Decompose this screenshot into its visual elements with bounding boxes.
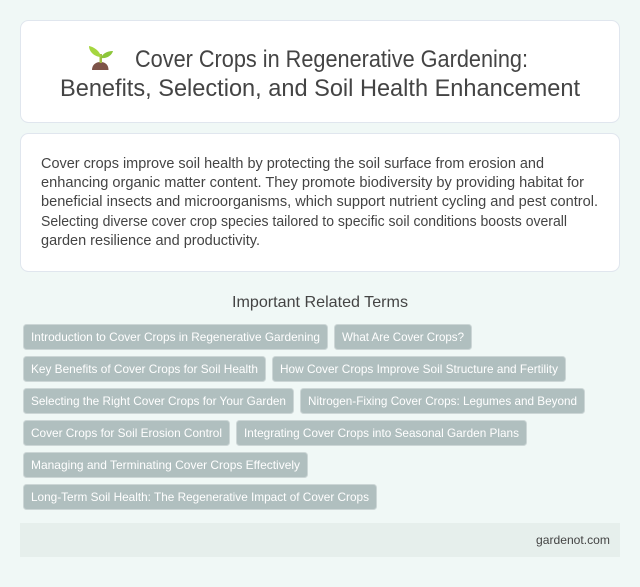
summary text	[41, 156, 598, 249]
tag	[24, 356, 266, 382]
heading: important related terms: Important Related Terms	[232, 294, 408, 311]
title	[60, 46, 580, 102]
tag: Nitrogen-Fixing Cover Crops: Legumes and Beyond	[308, 394, 577, 408]
summary text: beneficial insects and microorganisms, which support nutrient cycling and pest control.	[41, 194, 598, 210]
summary text: Cover crops improve soil health by protecting the soil surface from erosion and	[41, 156, 544, 172]
tag	[272, 356, 566, 382]
tag: Selecting the Right Cover Crops for Your Garden	[31, 394, 286, 408]
footer	[20, 523, 620, 557]
tag: Managing and Terminating Cover Crops Effectively	[31, 458, 300, 472]
footer site name: gardenot.com	[536, 533, 610, 547]
tag	[24, 324, 328, 350]
tag	[334, 324, 472, 350]
tag	[300, 388, 584, 414]
tag	[24, 484, 376, 510]
summary text: enhancing organic matter content. They promote biodiversity by providing habitat for	[41, 175, 584, 191]
tag: Cover Crops for Soil Erosion Control	[31, 426, 222, 440]
title: Cover Crops in Regenerative Gardening:	[135, 46, 528, 73]
tag: What Are Cover Crops?	[342, 330, 464, 344]
tag	[24, 420, 230, 446]
tag: Long-Term Soil Health: The Regenerative Impact of Cover Crops	[31, 490, 369, 504]
panel: summary	[20, 134, 620, 272]
summary text: garden resilience and productivity.	[41, 233, 260, 249]
tag: Integrating Cover Crops into Seasonal Garden Plans	[244, 426, 519, 440]
tag	[236, 420, 526, 446]
icon: seedling	[89, 46, 113, 70]
tag list	[24, 324, 584, 510]
panel: title header	[20, 20, 620, 122]
title: Benefits, Selection, and Soil Health Enhancement	[60, 75, 580, 102]
summary text: Selecting diverse cover crop species tailored to specific soil conditions boosts overall	[41, 214, 567, 230]
tag	[24, 388, 294, 414]
tag: Key Benefits of Cover Crops for Soil Health	[31, 362, 258, 376]
tag: Introduction to Cover Crops in Regenerative Gardening	[31, 330, 320, 344]
tag	[24, 452, 308, 478]
tag: How Cover Crops Improve Soil Structure and Fertility	[280, 362, 558, 376]
